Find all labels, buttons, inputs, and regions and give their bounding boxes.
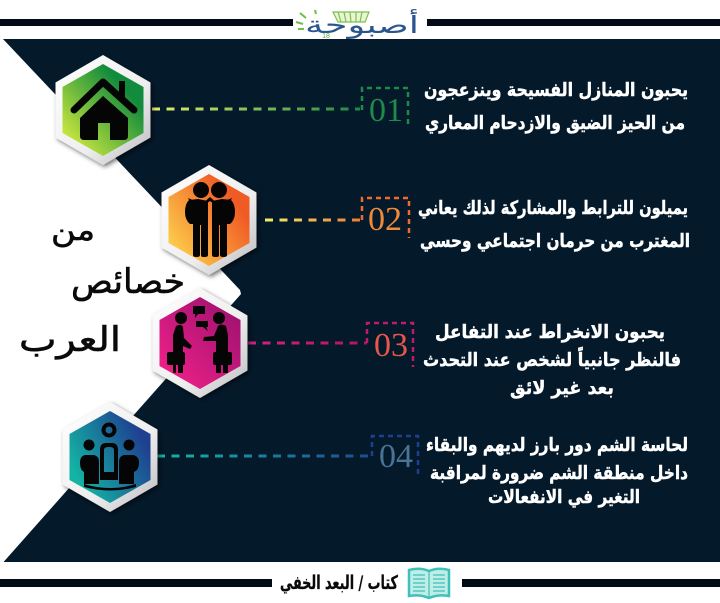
title line 1: من: [51, 213, 95, 248]
title line 2: خصائص: [71, 262, 185, 302]
title line 3: العرب: [19, 320, 121, 360]
logo: [296, 9, 419, 40]
item 3: [367, 322, 681, 399]
hexagon 4 frame: [62, 402, 158, 512]
text item 4: [426, 435, 688, 508]
number 01: 01: [369, 92, 403, 129]
connector line 1: [152, 108, 360, 111]
connector line 3: [248, 342, 367, 345]
footer credit: كتاب / البعد الخفي: [280, 572, 399, 594]
icon: two people: [185, 182, 235, 257]
number box 02: [362, 198, 409, 238]
hexagon 4: team: [62, 402, 158, 512]
hexagon 1: house: [56, 55, 150, 165]
text item 2: [418, 198, 690, 252]
hexagon 2 fill: [168, 174, 250, 266]
white diagonal shape: [0, 37, 241, 566]
number 02: 02: [368, 201, 402, 238]
icon: house: [74, 81, 134, 140]
header rule: right: [427, 19, 720, 26]
text item 3: بعد غير لائق: [510, 378, 614, 399]
logo rays: [296, 10, 316, 29]
logo wordmark: أصبوحة: [305, 9, 419, 39]
hexagon 2: two people: [162, 165, 256, 275]
item 4: [372, 435, 688, 508]
number box 04: [372, 436, 418, 477]
logo crown: [333, 12, 369, 22]
number box 01: [362, 88, 408, 127]
text item 3: فالنظر جانبياً لشخص عند التحدث: [423, 346, 681, 371]
hexagon 1 frame: [56, 55, 150, 165]
text item 3: [423, 322, 681, 399]
text item 4: التغير في الانفعالات: [488, 487, 640, 508]
text item 3: يحبون الانخراط عند التفاعل: [435, 322, 665, 343]
hexagon 1 fill: [62, 64, 144, 156]
connector line 4: [157, 454, 372, 458]
header rule: left: [0, 19, 293, 26]
icon: two people talking: [167, 306, 232, 373]
text item 1: [424, 80, 688, 135]
item 2: [362, 198, 690, 252]
icon: open book: [409, 569, 449, 598]
number box 03: [367, 323, 413, 367]
hexagon 2 frame: [162, 165, 256, 275]
hexagon 3: conversation: [152, 288, 248, 398]
title: [19, 213, 185, 360]
footer rule: left: [0, 579, 272, 587]
connector line 2: [265, 218, 362, 222]
number 03: 03: [374, 327, 408, 364]
footer rule: right: [462, 579, 720, 587]
hexagon 4 fill: [70, 411, 150, 503]
logo small number: 18: [322, 33, 330, 40]
icon: group of people: [80, 424, 139, 490]
hexagon 3 fill: [160, 297, 240, 389]
hexagon 3 frame: [152, 288, 248, 398]
number 04: 04: [379, 438, 413, 475]
item 1: [362, 80, 688, 135]
